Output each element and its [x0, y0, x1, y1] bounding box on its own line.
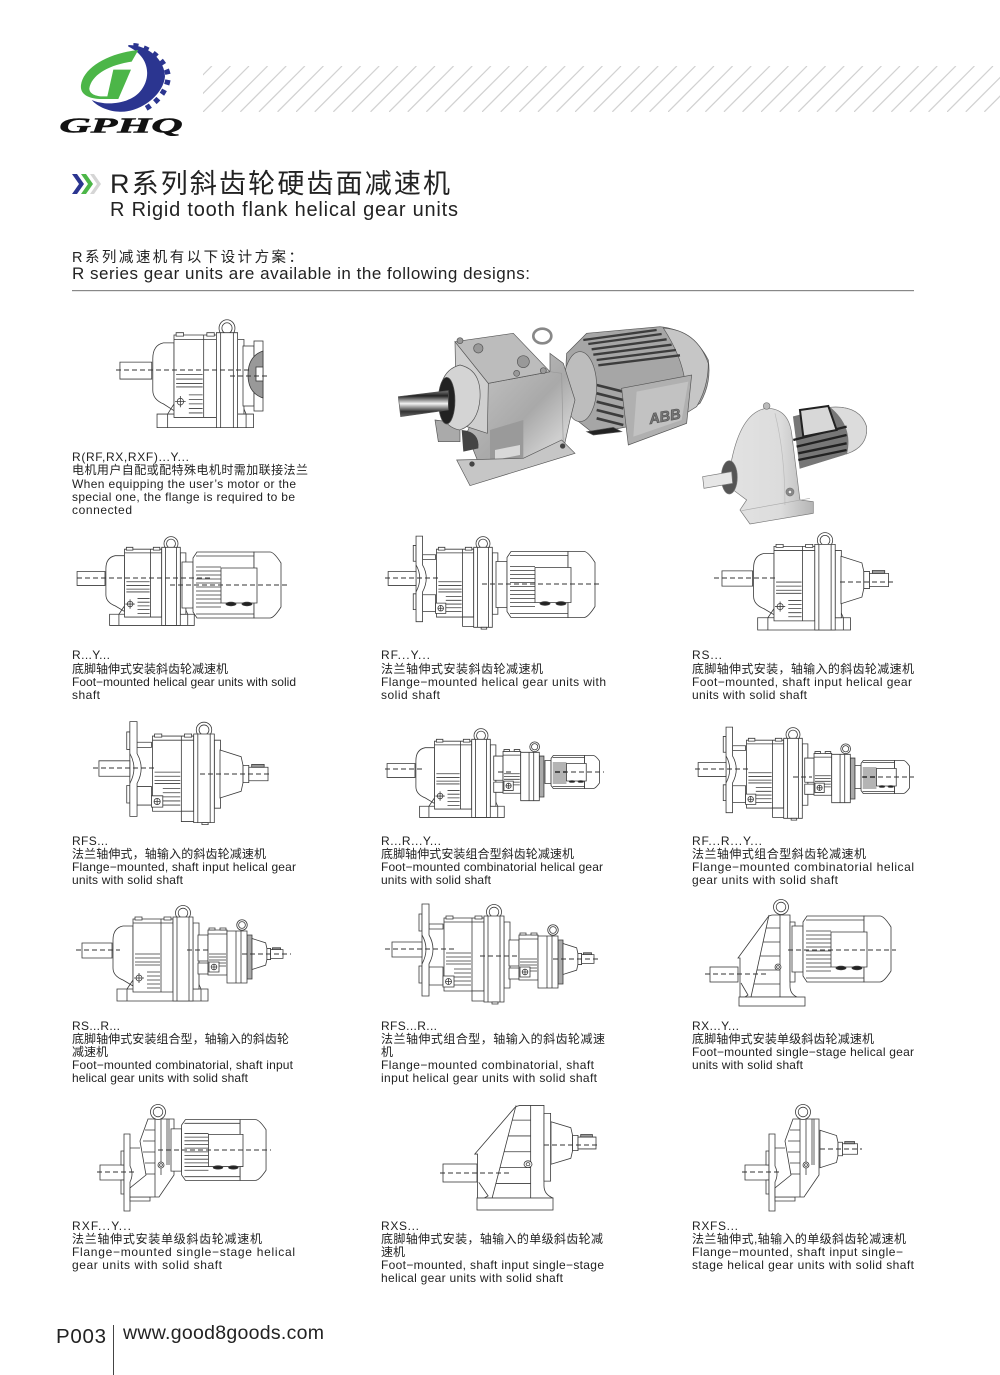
diagram: RF...Y...	[385, 536, 600, 629]
photo: small helical gear unit	[703, 403, 867, 524]
caption: RXS...: 底脚轴伸式安装，轴输入的单级斜齿轮减	[381, 1231, 603, 1246]
caption: RXS...	[381, 1219, 604, 1285]
caption: RS...R...: 减速机	[72, 1045, 108, 1059]
caption: RF...Y...	[381, 648, 606, 702]
intro text	[72, 248, 530, 283]
caption: RF...R...Y...: Flange−mounted combinatorial helical	[692, 860, 914, 874]
intro text: R系列减速机有以下设计方案：	[72, 248, 303, 266]
diagram: RF...R...Y...	[695, 727, 914, 820]
caption: RS...: 底脚轴伸式安装，轴输入的斜齿轮减速机	[692, 661, 914, 676]
logo wordmark: GPHQ	[59, 115, 183, 137]
caption: RX...Y...: 底脚轴伸式安装单级斜齿轮减速机	[692, 1031, 874, 1046]
caption: RFS...R...: 机	[381, 1045, 393, 1059]
header diagonal stripe band	[203, 66, 1000, 112]
diagram: RXFS...	[742, 1104, 862, 1211]
caption: R...R...Y...: units with solid shaft	[381, 873, 492, 887]
caption: RS...R...: RS...R...	[72, 1019, 120, 1033]
caption: R...R...Y...: Foot−mounted combinatorial helical gear	[381, 860, 603, 874]
gearbox housing	[455, 333, 575, 467]
caption: RX...Y...: units with solid shaft	[692, 1058, 804, 1072]
caption: R...Y...: shaft	[72, 688, 101, 702]
caption: R(RF,RX,RXF)...Y...	[72, 450, 308, 517]
title	[110, 169, 458, 221]
caption: RFS...: units with solid shaft	[72, 873, 184, 887]
caption: RF...Y...: Flange−mounted helical gear units with	[381, 675, 606, 689]
caption: RXF...Y...: RXF...Y...	[72, 1219, 131, 1233]
caption: R(RF,RX,RXF)...Y...: 电机用户自配或配特殊电机时需加联接法兰	[72, 462, 308, 477]
caption: R...R...Y...: R...R...Y...	[381, 834, 441, 848]
caption: RFS...R...: input helical gear units with solid shaft	[381, 1071, 598, 1085]
caption: R...R...Y...	[381, 834, 603, 887]
caption: R...R...Y...: 底脚轴伸式安装组合型斜齿轮减速机	[381, 846, 574, 861]
caption: RXFS...	[692, 1219, 915, 1272]
diagram: RS...	[714, 533, 893, 630]
diagram: RX...Y...	[705, 900, 896, 1006]
diagram: RXF...Y...	[97, 1104, 271, 1211]
diagram: RXS...	[440, 1105, 598, 1210]
foot	[435, 420, 575, 486]
terminal box	[622, 375, 692, 445]
caption: RXS...: RXS...	[381, 1219, 419, 1233]
caption: RS...R...: 底脚轴伸式安装组合型，轴输入的斜齿轮	[72, 1031, 289, 1046]
caption: R...Y...: Foot−mounted helical gear units with solid	[72, 675, 296, 689]
caption: RFS...R...: 法兰轴伸式组合型，轴输入的斜齿轮减速	[381, 1031, 605, 1046]
eye bolt	[533, 329, 551, 343]
caption: RF...Y...: 法兰轴伸式安装斜齿轮减速机	[381, 661, 543, 676]
diagram: RFS...R...	[385, 904, 600, 1004]
footer divider	[113, 1325, 114, 1375]
caption: RF...Y...: RF...Y...	[381, 648, 430, 662]
diagram: RFS...	[93, 722, 272, 825]
title: R Rigid tooth flank helical gear units	[110, 199, 458, 221]
diagram: R...Y...	[77, 537, 290, 625]
housing	[732, 403, 813, 524]
logo: GPHQ	[59, 45, 183, 137]
diagram: RS...R...	[76, 906, 291, 1001]
caption: R...Y...: 底脚轴伸式安装斜齿轮减速机	[72, 661, 228, 676]
caption: RFS...	[72, 834, 296, 887]
title: R系列斜齿轮硬齿面减速机	[110, 169, 450, 199]
caption: RX...Y...	[692, 1019, 914, 1072]
motor	[793, 406, 867, 468]
diagram: R(RF,RX,RXF)...Y...	[116, 320, 268, 428]
caption: R(RF,RX,RXF)...Y...: connected	[72, 503, 132, 517]
heading rule	[72, 290, 914, 291]
shaft	[703, 461, 737, 494]
caption: RFS...R...: Flange−mounted combinatorial, shaft	[381, 1058, 595, 1072]
terminal box: ABB	[647, 407, 682, 428]
caption: RF...R...Y...: 法兰轴伸式组合型斜齿轮减速机	[692, 846, 866, 861]
caption: RS...R...: Foot−mounted combinatorial, shaft input	[72, 1058, 294, 1072]
caption: RF...R...Y...: gear units with solid shaft	[692, 873, 839, 887]
diagram: R...R...Y...	[385, 729, 604, 817]
caption: RXF...Y...: 法兰轴伸式安装单级斜齿轮减速机	[72, 1231, 262, 1246]
caption: RX...Y...: Foot−mounted single−stage helical gear	[692, 1045, 914, 1059]
icon: title chevrons	[72, 174, 101, 194]
caption: RS...: Foot−mounted, shaft input helical gear	[692, 675, 912, 689]
caption: RXFS...: 法兰轴伸式,轴输入的单级斜齿轮减速机	[692, 1231, 906, 1246]
caption: RFS...: Flange−mounted, shaft input helical gear	[72, 860, 296, 874]
caption: RXF...Y...: gear units with solid shaft	[72, 1258, 223, 1272]
caption: RS...R...	[72, 1019, 294, 1085]
footer: page number: P003	[56, 1325, 106, 1348]
caption: RXF...Y...	[72, 1219, 295, 1272]
caption: RXS...: 速机	[381, 1245, 405, 1259]
caption: RS...R...: helical gear units with solid shaft	[72, 1071, 249, 1085]
caption: RF...Y...: solid shaft	[381, 688, 441, 702]
output cap and shaft	[398, 365, 480, 430]
caption: R...Y...: R...Y...	[72, 648, 110, 662]
caption: RXS...: Foot−mounted, shaft input single−stage	[381, 1258, 604, 1272]
footer: website: www.good8goods.com	[122, 1322, 324, 1344]
caption: RXS...: helical gear units with solid shaft	[381, 1271, 564, 1285]
caption: R...Y...	[72, 648, 296, 702]
caption: RFS...R...	[381, 1019, 605, 1085]
caption: RXF...Y...: Flange−mounted single−stage helical	[72, 1245, 295, 1259]
photo: large gear unit with motor	[398, 327, 709, 486]
intro text: R series gear units are available in the following designs:	[72, 264, 530, 283]
motor body	[563, 327, 709, 435]
caption: RF...R...Y...: RF...R...Y...	[692, 834, 762, 848]
caption: RS...: units with solid shaft	[692, 688, 808, 702]
caption: RS...	[692, 648, 914, 702]
caption: RX...Y...: RX...Y...	[692, 1019, 739, 1033]
caption: RFS...R...: RFS...R...	[381, 1019, 437, 1033]
caption: RXFS...: stage helical gear units with solid shaft	[692, 1258, 915, 1272]
caption: R(RF,RX,RXF)...Y...: special one, the flange is required to be	[72, 490, 295, 504]
caption: RF...R...Y...	[692, 834, 914, 887]
icon: gear crescent	[81, 45, 168, 112]
caption: RS...: RS...	[692, 648, 722, 662]
caption: RFS...: 法兰轴伸式，轴输入的斜齿轮减速机	[72, 846, 266, 861]
caption: RXFS...: RXFS...	[692, 1219, 738, 1233]
caption: RXFS...: Flange−mounted, shaft input single−	[692, 1245, 903, 1259]
caption: RFS...: RFS...	[72, 834, 108, 848]
caption: R(RF,RX,RXF)...Y...: When equipping the user’s motor or the	[72, 477, 296, 491]
caption: R(RF,RX,RXF)...Y...: R(RF,RX,RXF)...Y...	[72, 450, 189, 464]
